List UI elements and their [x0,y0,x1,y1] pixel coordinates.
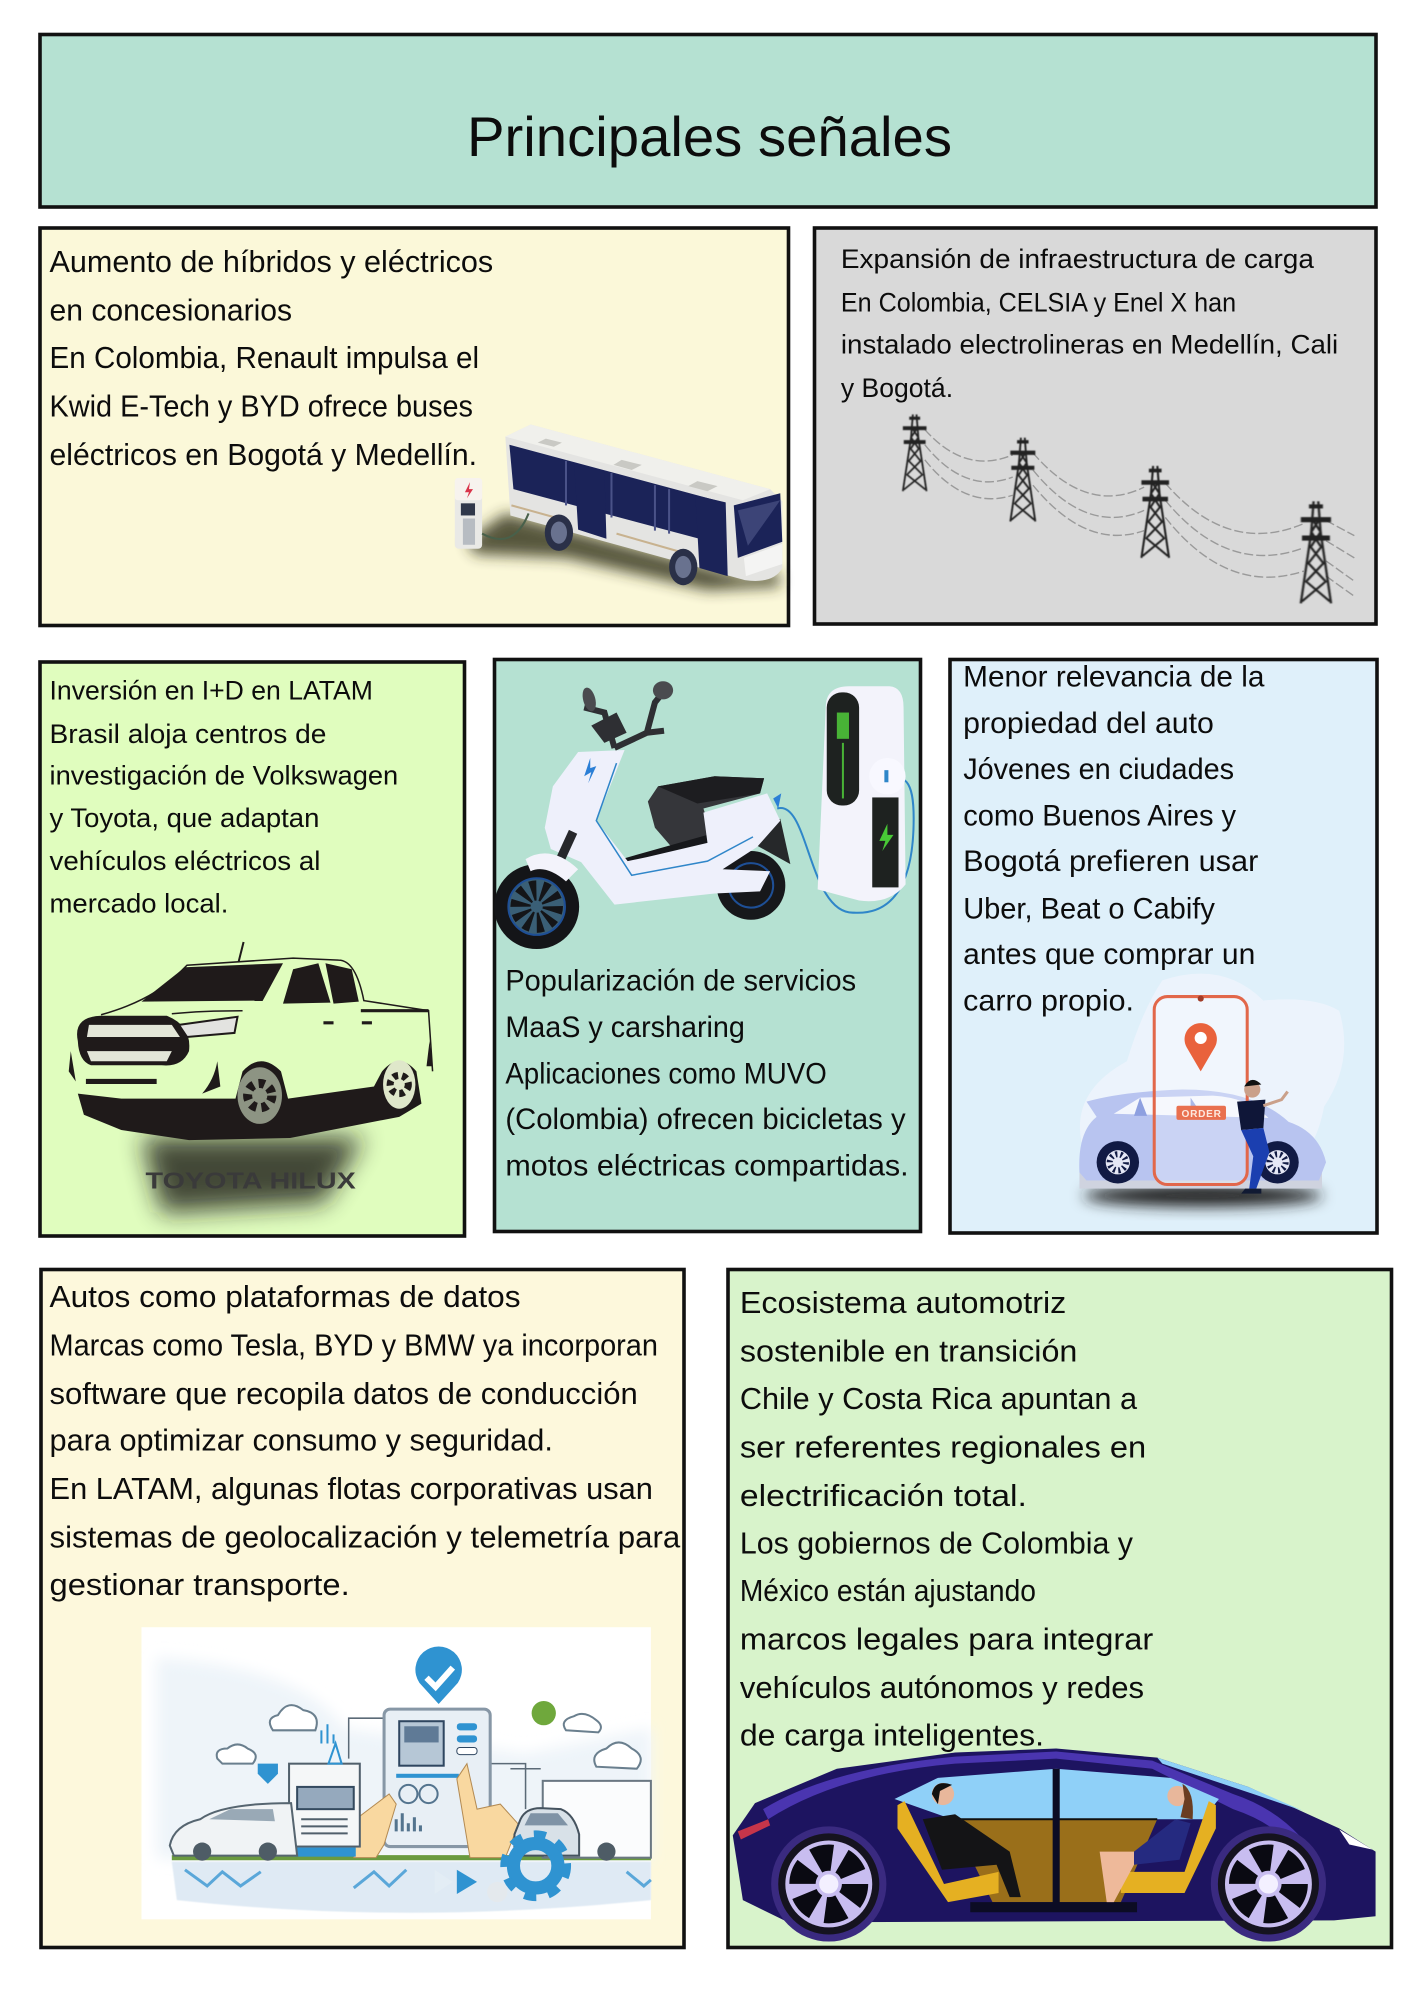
text: sustainable ecosystem [740,1285,1153,1752]
sub-icon: tablet [349,1709,541,1847]
text: car ownership: Uber, Beat o Cabify [963,893,1215,926]
sub-icon: rear wheel [771,1826,886,1942]
panel: charging infrastructure [814,228,1376,624]
title banner [40,34,1376,207]
panel: sustainable ecosystem [728,1270,1392,1948]
text: hybrids: en concesionarios [50,294,292,327]
text: R&D investment: Brasil aloja centros de [50,718,326,749]
sub-icon: car left [170,1764,297,1861]
icon: Toyota Hilux pickup [69,942,433,1213]
panel: hybrids and electric vehicles [40,228,788,626]
icon: electric bus with charger [455,424,782,590]
icon: ride-hailing phone and car [1079,974,1344,1207]
text: data platforms [50,1279,681,1602]
text: sustainable ecosystem: Los gobiernos de Colombia y [740,1525,1134,1560]
text: data platforms: para optimizar consumo y seguridad. [50,1422,553,1457]
text: charging infrastructure [841,243,1338,403]
text: data platforms: software que recopila datos de conducción [50,1376,638,1411]
sub-icon: gear and charts [185,1834,651,1902]
icon: electric scooter and charger [494,681,914,949]
text: sustainable ecosystem: sostenible en transición [740,1333,1077,1368]
text: sustainable ecosystem: de carga inteligentes. [740,1717,1044,1752]
text: car ownership: propiedad del auto [963,707,1214,740]
icon: autonomous purple car [733,1749,1376,1942]
sub-icon: front wheel [1211,1826,1326,1942]
text: car ownership: antes que comprar un [963,938,1255,971]
text: data platforms: Marcas como Tesla, BYD y BMW ya incorporan [50,1327,658,1362]
text: charging infrastructure: y Bogotá. [841,372,953,403]
text: charging infrastructure: Expansión de infraestructura de carga [841,243,1315,274]
title: Principales señales [467,105,952,168]
icon: power line towers [903,414,1354,603]
panel: R&D investment [40,662,464,1236]
text: data platforms: Autos como plataformas de datos [50,1279,521,1314]
text: R&D investment: Inversión en I+D en LATAM [50,674,373,705]
sub-icon: hands [354,1764,518,1858]
text: sustainable ecosystem: vehículos autónomos y redes [740,1670,1144,1705]
text: sustainable ecosystem: Chile y Costa Rica apuntan a [740,1381,1138,1416]
text: MaaS and carsharing: Aplicaciones como MUVO [505,1057,827,1090]
text: data platforms: sistemas de geolocalización y telemetría para [50,1519,681,1554]
text: car ownership: carro propio. [963,985,1134,1018]
sub-icon: van right [514,1781,651,1861]
text: hybrids: eléctricos en Bogotá y Medellín. [50,439,477,472]
text: hybrids: En Colombia, Renault impulsa el [50,342,479,375]
panel: lower relevance of car ownership [950,660,1377,1233]
text: MaaS and carsharing: Popularización de servicios [505,964,856,997]
text: data platforms: En LATAM, algunas flotas corporativas usan [50,1471,653,1506]
text: data platforms: gestionar transporte. [50,1567,350,1602]
text: MaaS and carsharing: MaaS y carsharing [505,1011,745,1044]
text: car ownership: como Buenos Aires y [963,800,1236,833]
text: R&D investment: mercado local. [50,888,228,919]
text: R&D investment: investigación de Volkswagen [50,759,398,790]
sub-icon: truck [289,1724,360,1857]
text: sustainable ecosystem: México están ajustando [740,1573,1036,1608]
text: car ownership: Bogotá prefieren usar [963,845,1259,878]
text: sustainable ecosystem: electrificación total. [740,1478,1027,1513]
text: hybrids: Kwid E-Tech y BYD ofrece buses [50,390,473,423]
text: MaaS and carsharing [505,964,909,1182]
text: car ownership: Jóvenes en ciudades [963,753,1234,786]
text: car ownership [963,660,1265,1018]
icon: Toyota Hilux pickup: TOYOTA HILUX [146,1168,356,1194]
text: hybrids [50,246,493,472]
text: sustainable ecosystem: marcos legales para integrar [740,1621,1153,1656]
panel: MaaS and carsharing [494,660,920,1232]
icon: connected fleet illustration [141,1627,651,1919]
text: R&D investment: vehículos eléctricos al [50,845,320,876]
sub-icon: check badge [415,1646,462,1704]
panel: cars as data platforms [41,1270,684,1948]
text: hybrids: Aumento de híbridos y eléctricos [50,246,493,279]
text: sustainable ecosystem: ser referentes regionales en [740,1429,1146,1464]
text: sustainable ecosystem: Ecosistema automotriz [740,1285,1066,1320]
text: MaaS and carsharing: motos eléctricas compartidas. [505,1149,909,1182]
text: R&D investment: y Toyota, que adaptan [50,802,319,833]
text: charging infrastructure: instalado electrolineras en Medellín, Cali [841,329,1338,360]
text: charging infrastructure: En Colombia, CELSIA y Enel X han [841,286,1236,317]
text: R&D investment [50,674,398,919]
text: MaaS and carsharing: (Colombia) ofrecen bicicletas y [505,1103,906,1136]
icon: ride-hailing phone and car: ORDER [1182,1109,1222,1120]
sub-icon: clouds [217,1705,641,1769]
text: car ownership: Menor relevancia de la [963,660,1265,693]
